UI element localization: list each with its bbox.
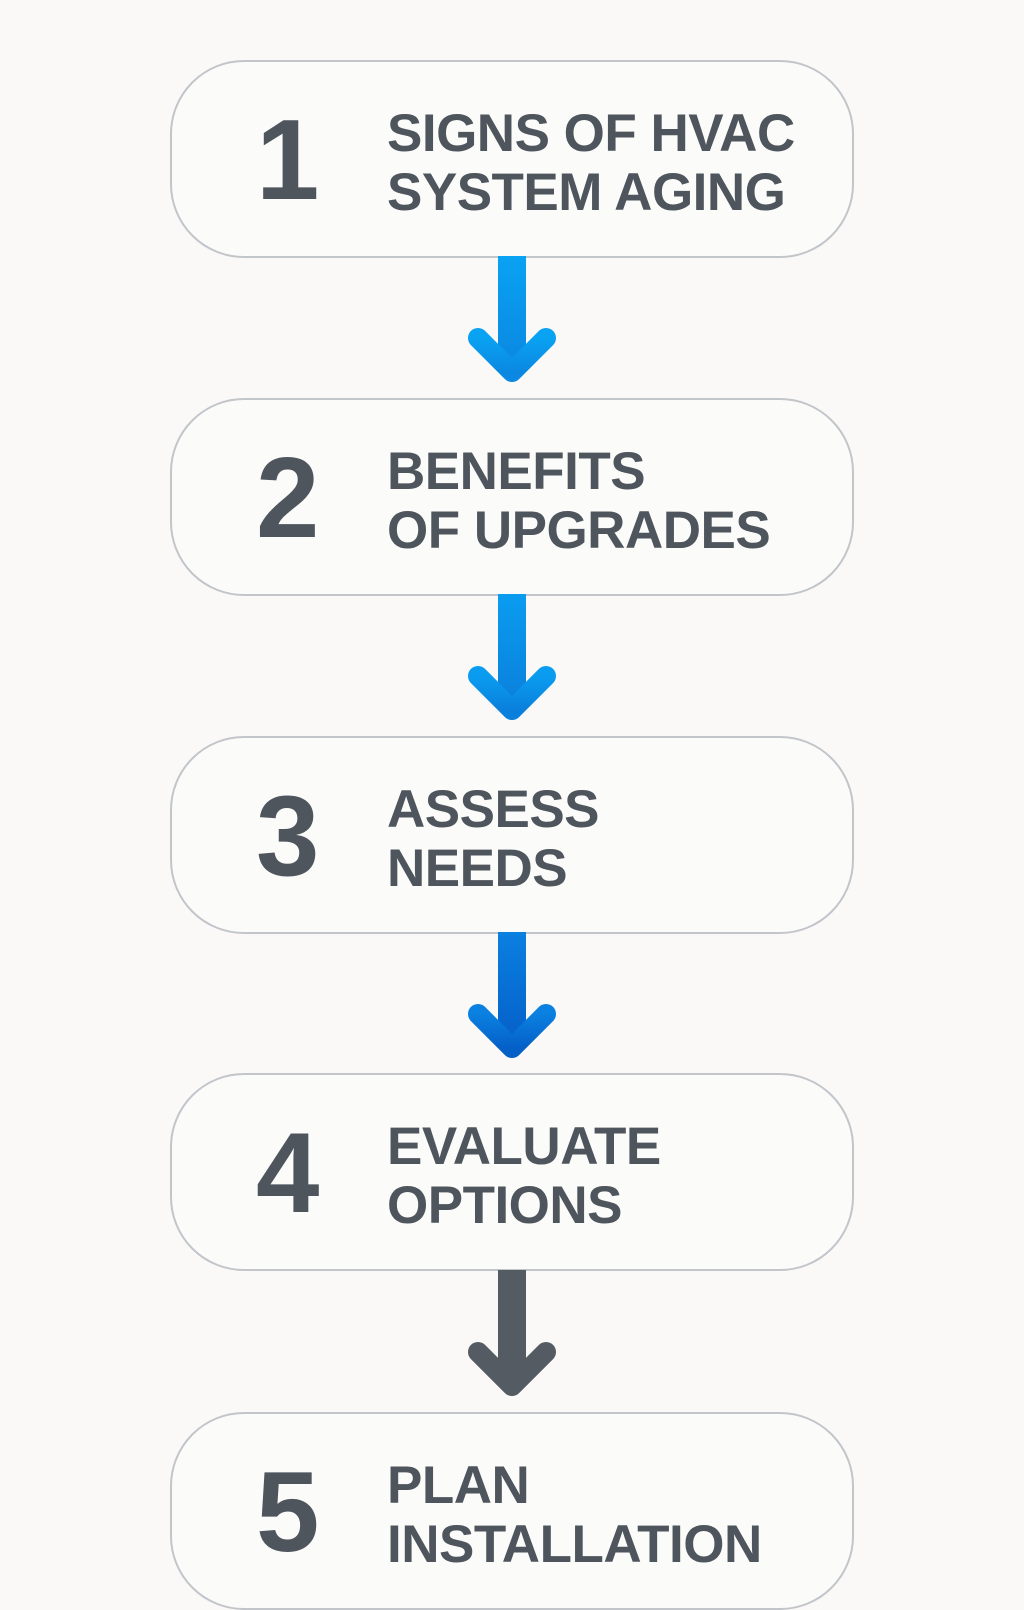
step 2 box: BENEFITS	[387, 442, 645, 501]
step 4 box	[170, 1073, 854, 1271]
arrow 2	[468, 594, 556, 720]
step 5 box	[170, 1412, 854, 1610]
step 4 box: OPTIONS	[387, 1176, 622, 1235]
step 5 box: PLAN	[387, 1456, 529, 1515]
step 3 box: ASSESS	[387, 780, 599, 839]
step 4 box: 4	[256, 1110, 319, 1237]
arrow 1	[468, 256, 556, 382]
step 1 box: SYSTEM AGING	[387, 163, 785, 222]
step 2 box: OF UPGRADES	[387, 501, 770, 560]
arrow 4	[468, 1270, 556, 1396]
step 5 box: INSTALLATION	[387, 1515, 762, 1574]
step 2 box: 2	[256, 435, 319, 562]
step 3 box: NEEDS	[387, 839, 567, 898]
step 2 box	[170, 398, 854, 596]
step 3 box: 3	[256, 773, 319, 900]
step 1 box	[170, 60, 854, 258]
step 4 box: EVALUATE	[387, 1117, 661, 1176]
step 5 box: 5	[256, 1449, 319, 1576]
step 1 box: 1	[256, 97, 319, 224]
arrow 3	[468, 932, 556, 1058]
step 3 box	[170, 736, 854, 934]
step 1 box: SIGNS OF HVAC	[387, 104, 795, 163]
